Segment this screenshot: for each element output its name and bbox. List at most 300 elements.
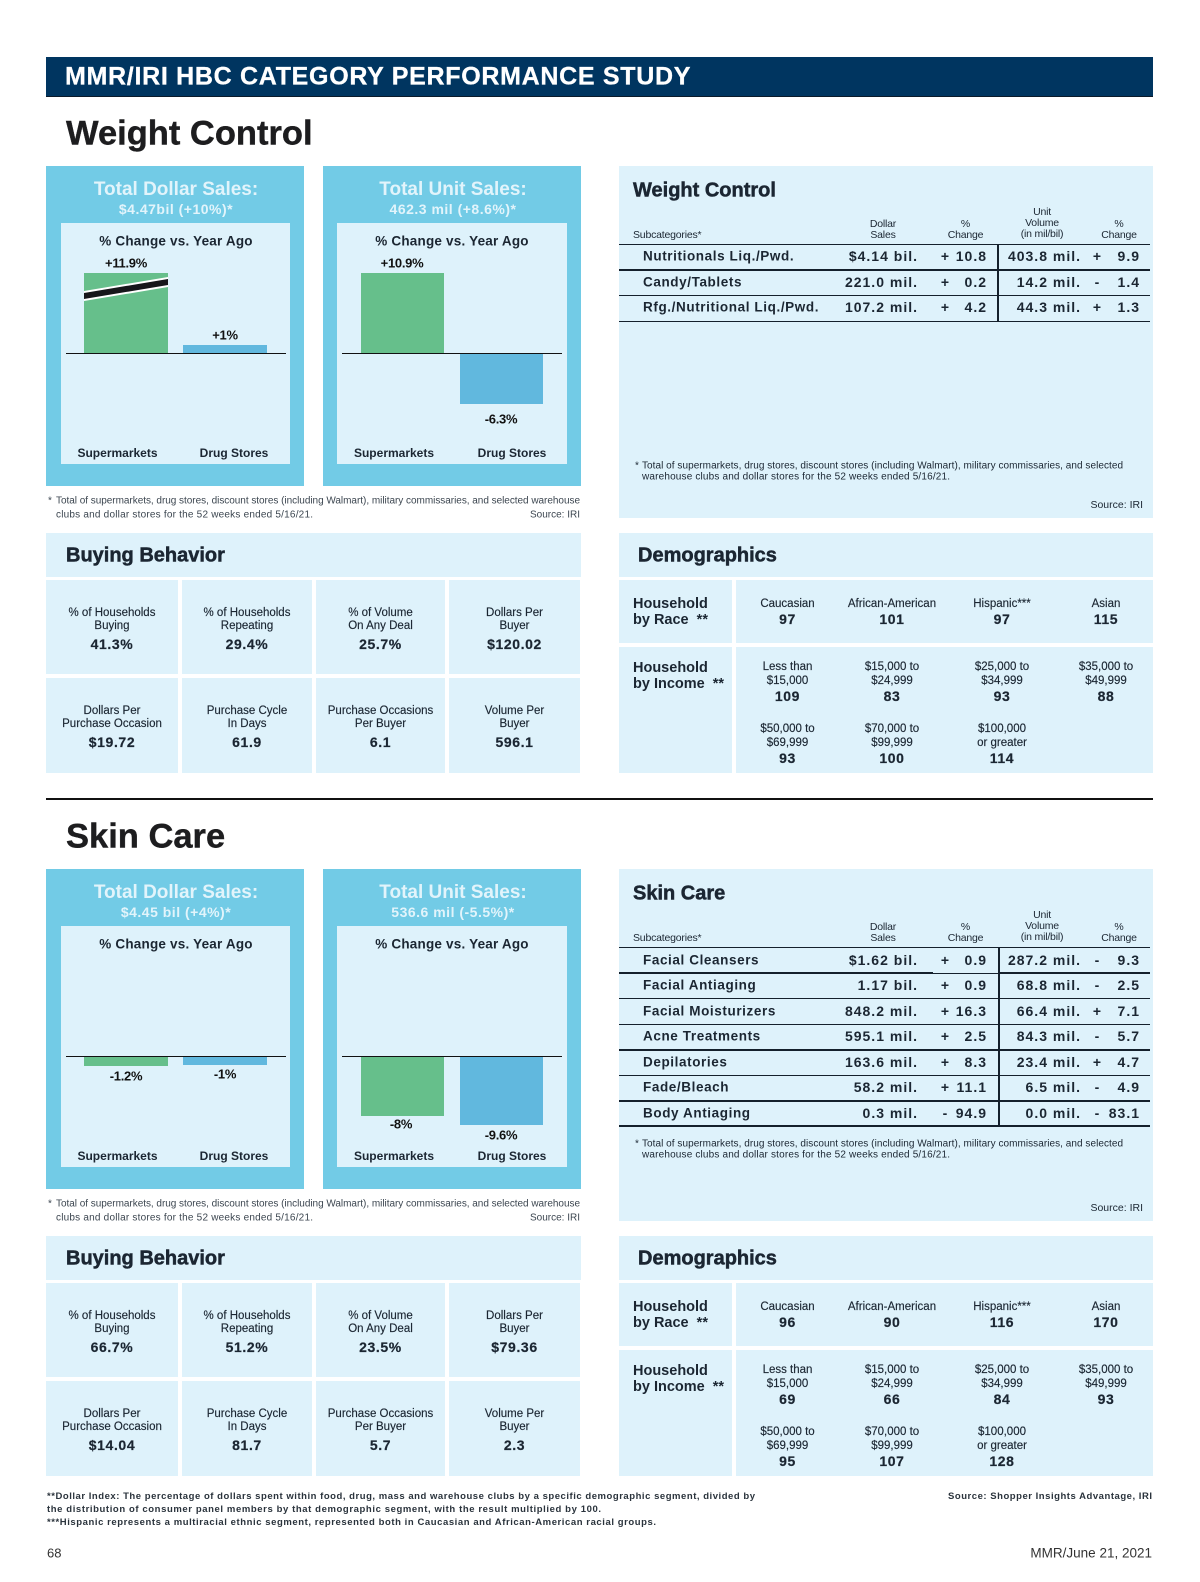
metric: On Any Deal bbox=[348, 620, 413, 632]
footnote and source: clubs and dollar stores for the 52 weeks ended 5/16/21. bbox=[56, 1212, 313, 1224]
values: household by income: $15,000 bbox=[767, 674, 808, 686]
row: facial moisturizers: Facial Moisturizers bbox=[643, 1003, 776, 1018]
footnote and source: Source: IRI bbox=[530, 1212, 580, 1224]
metric: Volume Per bbox=[485, 705, 544, 717]
row: body antiaging: 83.1 bbox=[1109, 1104, 1140, 1120]
metric bbox=[316, 580, 445, 674]
table footnote: * bbox=[635, 1138, 639, 1150]
row: facial moisturizers: + bbox=[941, 1002, 949, 1018]
row: candy/tablets: 1.4 bbox=[1118, 274, 1140, 290]
row: refrigerated nutritional: + bbox=[1093, 299, 1101, 315]
section: skin care bbox=[46, 818, 1153, 1476]
row: body antiaging: Body Antiaging bbox=[643, 1105, 751, 1120]
bottom footnotes bbox=[47, 1491, 1152, 1528]
value: -1.2%: -1.2% bbox=[110, 1068, 142, 1084]
column header: unit volume bbox=[1021, 909, 1063, 943]
column header: unit volume: Unit bbox=[1033, 909, 1051, 921]
values: household by race: 97 bbox=[779, 611, 796, 627]
label: household by race: by Race ** bbox=[633, 1315, 708, 1331]
table footnote bbox=[635, 1138, 1123, 1160]
metric: % of Households bbox=[204, 1310, 290, 1322]
row: nutritionals: + bbox=[941, 248, 949, 264]
metric bbox=[316, 678, 445, 773]
table footnote: warehouse clubs and dollar stores for the 52 weeks ended 5/16/21. bbox=[641, 472, 950, 482]
values: household by income: Less than bbox=[763, 1364, 812, 1376]
axis label: drug stores: Drug Stores bbox=[200, 446, 268, 460]
row: fade/bleach: - bbox=[1095, 1079, 1099, 1095]
bar chart: dollar sales bbox=[61, 223, 290, 464]
row: body antiaging: 0.0 mil. bbox=[1026, 1104, 1081, 1120]
row: depilatories: Depilatories bbox=[643, 1054, 727, 1069]
values: household by income: 100 bbox=[879, 750, 905, 766]
footnote and source: clubs and dollar stores for the 52 weeks ended 5/16/21. bbox=[56, 510, 313, 520]
table footnote: warehouse clubs and dollar stores for the 52 weeks ended 5/16/21. bbox=[641, 1150, 950, 1160]
row: facial cleansers: $1.62 bil. bbox=[849, 952, 918, 968]
row: facial moisturizers: 16.3 bbox=[956, 1002, 987, 1018]
row: facial moisturizers: 7.1 bbox=[1118, 1002, 1140, 1018]
values: household by income: $15,000 to bbox=[865, 661, 919, 673]
page number: 68 bbox=[47, 1546, 61, 1560]
values: household by race bbox=[736, 580, 1153, 643]
row: nutritionals: $4.14 bil. bbox=[849, 248, 918, 264]
values: household by race: African-American bbox=[848, 1300, 936, 1312]
values: household by race: Hispanic*** bbox=[973, 598, 1031, 610]
bar chart: unit sales bbox=[337, 223, 567, 464]
row: depilatories bbox=[643, 1054, 1140, 1070]
metric: Per Buyer bbox=[355, 718, 406, 730]
metric bbox=[182, 678, 312, 773]
section title: Weight Control bbox=[66, 114, 313, 152]
row: acne treatments: 595.1 mil. bbox=[845, 1028, 918, 1044]
values: household by income: $50,000 to bbox=[760, 1426, 815, 1438]
axis label: supermarkets: Supermarkets bbox=[354, 1149, 434, 1163]
metric: Dollars Per bbox=[84, 1408, 140, 1420]
row: fade/bleach: Fade/Bleach bbox=[643, 1080, 729, 1094]
metric: 2.3 bbox=[504, 1437, 525, 1453]
footnote and source: Source: IRI bbox=[530, 510, 580, 520]
values: household by income: $69,999 bbox=[767, 1440, 808, 1452]
footnote and source bbox=[48, 1198, 580, 1224]
bar: drug stores -9.6% bbox=[460, 1057, 543, 1125]
metric bbox=[46, 678, 178, 773]
publication date: MMR/June 21, 2021 bbox=[1030, 1546, 1152, 1560]
metric bbox=[449, 580, 580, 674]
table footnote: Total of supermarkets, drug stores, discount stores (including Walmart), military commissaries, and selected bbox=[642, 460, 1123, 472]
row: depilatories: 8.3 bbox=[965, 1054, 987, 1070]
bottom footnotes: **Dollar Index: The percentage of dollars spent within food, drug, mass and warehouse clubs by a specific demographic segment, divided by bbox=[47, 1491, 756, 1502]
axis label: supermarkets: Supermarkets bbox=[77, 446, 158, 460]
row: nutritionals: 10.8 bbox=[956, 248, 987, 264]
values: household by income: $49,999 bbox=[1085, 674, 1127, 686]
column header: % change: % bbox=[961, 218, 970, 230]
value: -6.3%: -6.3% bbox=[485, 412, 517, 426]
column header: % change: Change bbox=[1101, 229, 1137, 241]
values: household by income: $25,000 to bbox=[975, 661, 1029, 673]
values: household by income: 93 bbox=[1098, 1391, 1114, 1407]
metric: 61.9 bbox=[232, 734, 262, 750]
chart title: % Change vs. Year Ago bbox=[375, 234, 529, 248]
values: household by race: 97 bbox=[994, 611, 1010, 627]
metric bbox=[449, 678, 580, 773]
metric: 66.7% bbox=[91, 1339, 133, 1355]
panel: total dollar sales bbox=[46, 869, 304, 1189]
axis label: drug stores: Drug Stores bbox=[200, 1149, 268, 1163]
column header: unit volume: Unit bbox=[1033, 206, 1051, 218]
values: household by income: $15,000 to bbox=[865, 1364, 919, 1376]
bar: drug stores -1% bbox=[183, 1057, 267, 1065]
bar chart: dollar sales bbox=[61, 926, 290, 1167]
values: household by income: $35,000 to bbox=[1079, 1364, 1133, 1376]
panel: total unit sales bbox=[323, 166, 581, 486]
column header: dollar sales: Dollar bbox=[870, 921, 896, 933]
row: depilatories: 4.7 bbox=[1118, 1054, 1140, 1070]
column header: % change bbox=[1101, 218, 1137, 241]
row: facial moisturizers: 66.4 mil. bbox=[1017, 1002, 1081, 1018]
values: household by income: or greater bbox=[977, 736, 1027, 748]
row: facial cleansers: 9.3 bbox=[1118, 952, 1140, 968]
metric: Purchase Occasion bbox=[62, 718, 162, 730]
values: household by race: Asian bbox=[1092, 1300, 1120, 1312]
metric: Repeating bbox=[221, 1323, 273, 1335]
banner title: MMR/IRI HBC CATEGORY PERFORMANCE STUDY bbox=[65, 62, 691, 90]
values: household by income: 93 bbox=[994, 688, 1010, 704]
values: household by income: $70,000 to bbox=[865, 723, 919, 735]
values: household by race: 116 bbox=[990, 1314, 1014, 1330]
panel heading: Total Dollar Sales: bbox=[94, 882, 258, 903]
column header: % change bbox=[948, 218, 983, 241]
table title: Weight Control bbox=[633, 180, 776, 202]
metric: Purchase Cycle bbox=[207, 705, 287, 717]
row: candy/tablets: 221.0 mil. bbox=[845, 274, 918, 290]
row: fade/bleach: 11.1 bbox=[957, 1079, 987, 1095]
metric bbox=[449, 1283, 580, 1377]
row: acne treatments: 2.5 bbox=[965, 1028, 987, 1044]
metric: % of Households bbox=[204, 607, 290, 619]
chart title: % Change vs. Year Ago bbox=[99, 936, 253, 952]
column header: % change bbox=[1101, 921, 1137, 944]
values: household by income: $25,000 to bbox=[975, 1364, 1029, 1376]
row: nutritionals: + bbox=[1093, 248, 1101, 264]
row: refrigerated nutritional: + bbox=[941, 299, 949, 315]
row: facial antiaging: 0.9 bbox=[965, 977, 987, 993]
column header: % change: % bbox=[1114, 218, 1124, 230]
panel: subcategory table bbox=[619, 869, 1153, 1221]
panel subheading: 462.3 mil (+8.6%)* bbox=[390, 201, 516, 217]
metric bbox=[46, 1283, 178, 1377]
row: facial cleansers: + bbox=[941, 952, 949, 968]
row: acne treatments: + bbox=[941, 1028, 949, 1044]
values: household by race: Hispanic*** bbox=[973, 1300, 1031, 1312]
row: acne treatments: - bbox=[1095, 1028, 1099, 1044]
row: depilatories: + bbox=[941, 1054, 949, 1070]
row: refrigerated nutritional: 107.2 mil. bbox=[845, 299, 918, 315]
values: household by income: 83 bbox=[884, 688, 900, 704]
metric: Purchase Occasions bbox=[328, 1408, 433, 1420]
values: household by income bbox=[736, 647, 1153, 773]
metric: Buyer bbox=[499, 1421, 530, 1433]
metric: Purchase Occasions bbox=[328, 705, 433, 717]
row: fade/bleach bbox=[643, 1079, 1140, 1095]
row: depilatories: 163.6 mil. bbox=[845, 1054, 918, 1070]
bar: drug stores -6.3% bbox=[460, 354, 543, 404]
metric bbox=[449, 1381, 580, 1476]
row: facial moisturizers bbox=[643, 1002, 1140, 1018]
column header: subcategories: Subcategories* bbox=[633, 932, 701, 944]
row: refrigerated nutritional bbox=[643, 299, 1140, 315]
label: household by income: by Income ** bbox=[633, 676, 724, 692]
row: candy/tablets: + bbox=[941, 274, 949, 290]
label: household by race: by Race ** bbox=[633, 612, 708, 628]
metric bbox=[316, 1381, 445, 1476]
row: depilatories: 23.4 mil. bbox=[1017, 1054, 1081, 1070]
row: nutritionals: 403.8 mil. bbox=[1008, 248, 1081, 264]
panel heading: Total Unit Sales: bbox=[379, 882, 527, 903]
header banner bbox=[46, 57, 1153, 97]
row: facial antiaging: + bbox=[941, 977, 949, 993]
label: household by race bbox=[619, 580, 732, 643]
metric: Volume Per bbox=[485, 1408, 544, 1420]
label: household by race: Household bbox=[633, 596, 708, 612]
heading: buying behavior: Buying Behavior bbox=[66, 544, 225, 566]
metric: % of Volume bbox=[348, 607, 413, 619]
metric: $14.04 bbox=[89, 1437, 135, 1453]
heading: buying behavior bbox=[46, 533, 581, 577]
values: household by income: $99,999 bbox=[871, 736, 913, 748]
metric: Buyer bbox=[499, 718, 530, 730]
values: household by income: 84 bbox=[994, 1391, 1010, 1407]
metric: In Days bbox=[228, 718, 266, 730]
row: candy/tablets bbox=[643, 274, 1140, 290]
values: household by race: Caucasian bbox=[760, 598, 815, 610]
column header: % change: % bbox=[961, 921, 970, 933]
metric: Buyer bbox=[499, 620, 530, 632]
table title: Skin Care bbox=[633, 882, 725, 904]
values: household by race: 101 bbox=[879, 611, 905, 627]
values: household by income: $99,999 bbox=[871, 1440, 913, 1452]
row: nutritionals: 9.9 bbox=[1118, 248, 1140, 264]
chart title: % Change vs. Year Ago bbox=[99, 234, 253, 248]
metric bbox=[182, 580, 312, 674]
row: candy/tablets: - bbox=[1095, 274, 1099, 290]
value: -8%: -8% bbox=[390, 1116, 412, 1132]
row: facial moisturizers: 848.2 mil. bbox=[845, 1002, 918, 1018]
panel: subcategory table bbox=[619, 166, 1153, 518]
column header: % change: Change bbox=[948, 932, 983, 944]
panel subheading: 536.6 mil (-5.5%)* bbox=[391, 904, 515, 920]
metric: Dollars Per bbox=[486, 1310, 543, 1322]
metric: 81.7 bbox=[232, 1437, 262, 1453]
metric: % of Households bbox=[69, 607, 155, 619]
values: household by income: $35,000 to bbox=[1079, 661, 1133, 673]
row: acne treatments: 84.3 mil. bbox=[1017, 1028, 1081, 1044]
bottom footnotes: Source: Shopper Insights Advantage, IRI bbox=[948, 1491, 1152, 1502]
row: fade/bleach: 4.9 bbox=[1118, 1079, 1140, 1095]
metric: 29.4% bbox=[226, 636, 268, 652]
metric: 51.2% bbox=[226, 1339, 268, 1355]
metric: On Any Deal bbox=[348, 1323, 413, 1335]
metric: Dollars Per bbox=[84, 705, 140, 717]
bar: supermarkets +11.9% with axis break bbox=[84, 273, 168, 353]
label: household by race bbox=[619, 1283, 732, 1346]
heading: buying behavior bbox=[46, 1236, 581, 1280]
row: facial cleansers: Facial Cleansers bbox=[643, 952, 759, 967]
row: acne treatments: Acne Treatments bbox=[643, 1028, 761, 1044]
table footnote: * bbox=[635, 460, 639, 472]
panel: total dollar sales bbox=[46, 166, 304, 486]
metric: Repeating bbox=[221, 620, 273, 632]
row: nutritionals: Nutritionals Liq./Pwd. bbox=[643, 248, 794, 264]
metric: 41.3% bbox=[91, 636, 133, 652]
value: -9.6%: -9.6% bbox=[485, 1128, 517, 1142]
axis label: supermarkets: Supermarkets bbox=[354, 446, 434, 460]
column header: dollar sales: Sales bbox=[870, 932, 896, 944]
metric: Buying bbox=[94, 1323, 130, 1335]
row: body antiaging: 0.3 mil. bbox=[863, 1104, 918, 1120]
metric: 6.1 bbox=[370, 734, 391, 750]
row: facial antiaging: - bbox=[1095, 977, 1099, 993]
table source: Source: IRI bbox=[1090, 499, 1143, 511]
values: household by income: 66 bbox=[884, 1391, 900, 1407]
footnote and source: * bbox=[48, 1198, 52, 1210]
column header: % change: % bbox=[1114, 921, 1124, 933]
values: household by race bbox=[736, 1283, 1153, 1346]
panel heading: Total Dollar Sales: bbox=[94, 179, 258, 200]
value: -1%: -1% bbox=[214, 1066, 236, 1082]
values: household by income: $50,000 to bbox=[760, 723, 815, 735]
label: household by income bbox=[619, 647, 732, 773]
row: candy/tablets: 0.2 bbox=[965, 274, 987, 290]
metric: In Days bbox=[228, 1421, 266, 1433]
chart title: % Change vs. Year Ago bbox=[375, 936, 529, 952]
values: household by income: $34,999 bbox=[981, 674, 1023, 686]
metric: Purchase Occasion bbox=[62, 1421, 162, 1433]
values: household by race: African-American bbox=[848, 598, 936, 610]
column header: unit volume: (in mil/bil) bbox=[1021, 931, 1063, 943]
column header: % change: Change bbox=[1101, 932, 1137, 944]
heading: buying behavior: Buying Behavior bbox=[66, 1248, 225, 1270]
heading: demographics: Demographics bbox=[638, 1248, 777, 1270]
row: facial cleansers: 0.9 bbox=[965, 952, 987, 968]
metric: $19.72 bbox=[89, 734, 135, 750]
label: household by race: Household bbox=[633, 1299, 708, 1315]
label: household by income: by Income ** bbox=[633, 1379, 724, 1395]
metric: 5.7 bbox=[370, 1437, 391, 1453]
values: household by income: $70,000 to bbox=[865, 1426, 919, 1438]
values: household by income: 93 bbox=[779, 750, 796, 766]
values: household by income: 69 bbox=[779, 1391, 796, 1407]
label: household by income bbox=[619, 1350, 732, 1476]
column header: subcategories: Subcategories* bbox=[633, 229, 701, 241]
row: facial antiaging: Facial Antiaging bbox=[643, 978, 756, 992]
values: household by race: 115 bbox=[1094, 611, 1118, 627]
bar: supermarkets -8% bbox=[361, 1057, 444, 1116]
metric: $120.02 bbox=[487, 636, 542, 652]
values: household by income: Less than bbox=[763, 661, 812, 673]
section title: Skin Care bbox=[66, 818, 225, 856]
heading: demographics bbox=[619, 533, 1153, 577]
metric: Buyer bbox=[499, 1323, 530, 1335]
metric bbox=[182, 1381, 312, 1476]
label: household by income: Household bbox=[633, 1363, 708, 1379]
metric: 23.5% bbox=[359, 1339, 402, 1355]
row: refrigerated nutritional: 44.3 mil. bbox=[1017, 299, 1081, 315]
table source: Source: IRI bbox=[1090, 1202, 1143, 1214]
row: fade/bleach: 6.5 mil. bbox=[1026, 1079, 1081, 1095]
table footnote: Total of supermarkets, drug stores, discount stores (including Walmart), military commissaries, and selected bbox=[642, 1138, 1123, 1150]
values: household by income: $100,000 bbox=[978, 1426, 1026, 1438]
column header: unit volume: (in mil/bil) bbox=[1021, 228, 1063, 240]
values: household by race: 90 bbox=[884, 1314, 900, 1330]
values: household by income bbox=[736, 1350, 1153, 1476]
metric: $79.36 bbox=[491, 1339, 538, 1355]
row: facial cleansers bbox=[643, 952, 1140, 968]
row: fade/bleach: 58.2 mil. bbox=[854, 1079, 918, 1095]
row: body antiaging: 94.9 bbox=[956, 1104, 987, 1120]
values: household by income: 95 bbox=[779, 1453, 796, 1469]
bar chart: unit sales bbox=[337, 926, 567, 1167]
axis label: drug stores: Drug Stores bbox=[478, 446, 546, 460]
values: household by income: $34,999 bbox=[981, 1378, 1023, 1390]
row: facial cleansers: 287.2 mil. bbox=[1008, 952, 1081, 968]
row: acne treatments bbox=[643, 1028, 1140, 1044]
value: +10.9%: +10.9% bbox=[381, 256, 423, 270]
metric: Buying bbox=[94, 620, 130, 632]
values: household by income: 107 bbox=[879, 1453, 905, 1469]
grid: buying behavior metrics bbox=[46, 1283, 580, 1476]
value: +1%: +1% bbox=[212, 328, 238, 342]
values: household by race: Caucasian bbox=[760, 1300, 815, 1312]
metric: 596.1 bbox=[495, 734, 534, 750]
metric bbox=[46, 1381, 178, 1476]
column header: dollar sales: Sales bbox=[870, 229, 896, 241]
label: household by income: Household bbox=[633, 660, 708, 676]
column header: unit volume: Volume bbox=[1025, 920, 1059, 932]
row: facial antiaging: 68.8 mil. bbox=[1017, 977, 1081, 993]
row: nutritionals bbox=[643, 248, 1140, 264]
row: facial antiaging: 1.17 bil. bbox=[858, 977, 918, 993]
column header: dollar sales bbox=[870, 921, 896, 944]
row: body antiaging: - bbox=[1095, 1104, 1099, 1120]
bar: supermarkets -1.2% bbox=[84, 1057, 168, 1066]
footnote and source: Total of supermarkets, drug stores, discount stores (including Walmart), military commissaries, and selected warehouse bbox=[56, 496, 580, 506]
values: household by income: $100,000 bbox=[978, 723, 1026, 735]
values: household by race: 96 bbox=[779, 1314, 796, 1330]
panel: total unit sales bbox=[323, 869, 581, 1189]
bar: drug stores +1% bbox=[183, 345, 267, 353]
section: weight control bbox=[46, 114, 1153, 773]
values: household by income: $24,999 bbox=[871, 674, 913, 686]
row: depilatories: + bbox=[1093, 1054, 1101, 1070]
metric: 25.7% bbox=[359, 636, 402, 652]
row: refrigerated nutritional: Rfg./Nutritional Liq./Pwd. bbox=[643, 300, 819, 314]
footnote and source: * bbox=[48, 496, 52, 506]
values: household by income: 109 bbox=[775, 688, 800, 704]
row: refrigerated nutritional: 1.3 bbox=[1118, 299, 1140, 315]
row: facial antiaging bbox=[643, 977, 1140, 993]
column header: unit volume bbox=[1021, 206, 1063, 240]
metric: Per Buyer bbox=[355, 1421, 406, 1433]
values: household by race: 170 bbox=[1093, 1314, 1119, 1330]
values: household by income: or greater bbox=[977, 1440, 1027, 1452]
values: household by income: $69,999 bbox=[767, 736, 808, 748]
metric: Dollars Per bbox=[486, 607, 543, 619]
values: household by income: $24,999 bbox=[871, 1378, 913, 1390]
row: facial antiaging: 2.5 bbox=[1118, 977, 1140, 993]
metric: Purchase Cycle bbox=[207, 1408, 287, 1420]
bottom footnotes: ***Hispanic represents a multiracial ethnic segment, represented both in Caucasian and African-American racial groups. bbox=[47, 1517, 656, 1528]
table footnote bbox=[635, 460, 1123, 482]
column header: % change bbox=[948, 921, 983, 944]
